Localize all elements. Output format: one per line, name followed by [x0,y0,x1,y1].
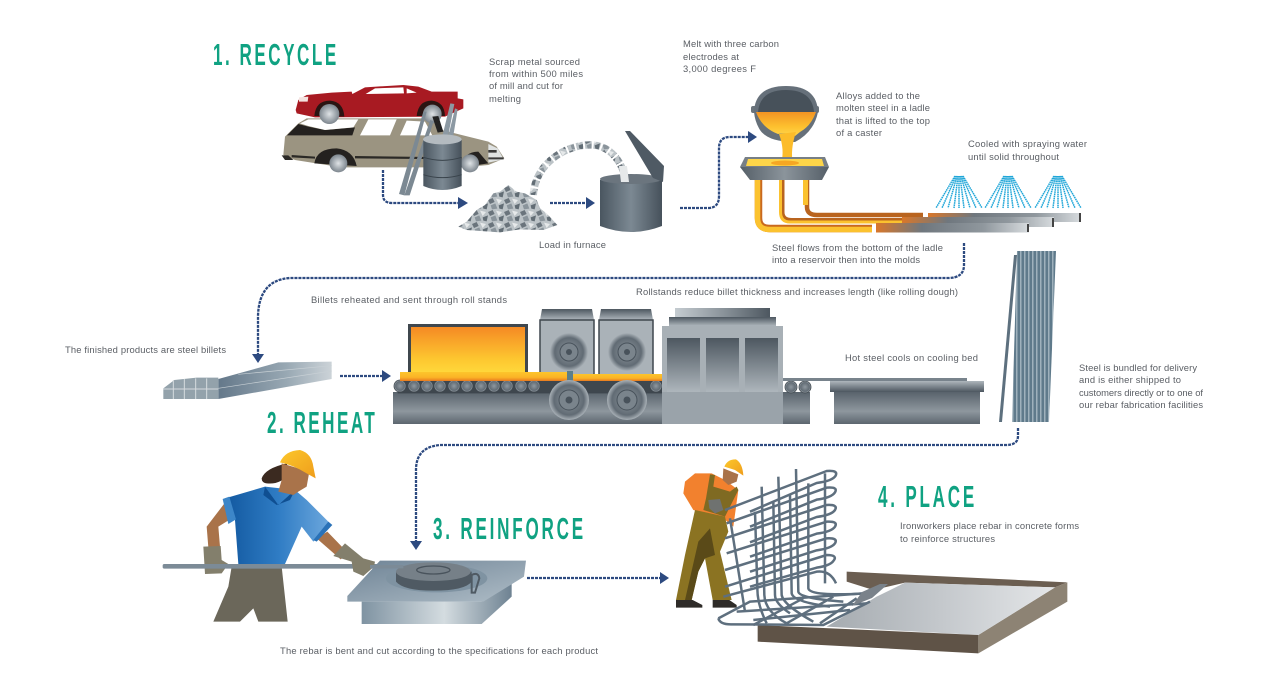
icon: scrap pile with arc [458,145,625,232]
icon: rods [399,103,458,195]
caption: bundled: Steel is bundled for delivery [1079,362,1197,373]
icon: steel billets [163,362,332,399]
icon: molds [876,213,1081,232]
rod end [370,565,403,568]
icon: roller row [394,380,663,393]
concrete over cage end [852,584,888,606]
helmet [280,450,316,478]
overalls [676,510,732,600]
panel: rolling mill [393,308,984,424]
caption: cooled: Cooled with spraying water [968,138,1087,149]
icon: cooling bed [783,378,984,424]
caption: ironworkers [900,520,1079,544]
caption: alloys [836,90,930,138]
back wall [847,572,1067,590]
caption: scrap metal: melting [489,93,521,104]
arrow: cars to scrap pile [383,170,468,209]
icon: red car [296,85,463,124]
caption: alloys: of a caster [836,127,882,138]
caption: melt: electrodes at [683,51,739,62]
face [278,463,309,495]
caption: ironworkers: to reinforce structures [900,533,995,544]
label: load in furnace: Load in furnace [539,239,606,250]
caption: bundled [1079,362,1203,410]
concrete [827,583,1055,635]
billet side [218,362,332,399]
pin [472,574,479,593]
caption: rollstands: Rollstands reduce billet thickness and increases length (like rolling dough) [636,286,958,297]
caption: steel flows: into a reservoir then into the molds [772,254,920,265]
caption: cooled: until solid throughout [968,151,1059,162]
illustration: concrete form [758,572,1067,653]
caption: cooling: Hot steel cools on cooling bed [845,352,978,363]
shirt [683,473,738,527]
caption: rebar bent: The rebar is bent and cut according to the specifications for each product [280,645,598,656]
cage hoops [723,471,836,597]
caption: melt: Melt with three carbon [683,38,779,49]
title: 2. Reheat: 2. REHEAT [267,406,375,440]
caption: bundled: our rebar fabrication facilities [1079,399,1203,410]
icon: roll stand two [599,309,653,383]
caption: alloys: Alloys added to the [836,90,920,101]
caption: scrap metal: from within 500 miles [489,68,583,79]
cage floor [718,592,877,625]
billet ends [163,378,218,399]
hair [262,463,290,484]
illustration: bending machine [347,561,526,624]
pants [213,567,288,622]
machine body [362,580,512,624]
arrow: bender to placing [527,572,669,584]
illustration: worker with rebar [163,450,399,622]
icon: pipes [758,178,923,230]
icon: stacked scrap cars and drum [282,85,504,195]
cage uprights [730,469,867,623]
icon: furnace [600,131,664,232]
icon: tundish [740,157,829,180]
overalls shadow [685,528,715,600]
shirt [225,487,332,564]
boots [676,600,737,608]
left glove [203,546,228,574]
right glove [333,543,375,576]
right wall [978,582,1067,653]
caption: alloys: molten steel in a ladle [836,102,930,113]
caption: scrap metal [489,56,583,104]
glove [708,499,723,513]
icon: drum [423,134,462,190]
arrow: bundle to bender [410,428,1018,550]
caption: alloys: that is lifted to the top [836,115,930,126]
caption: steel flows [772,242,943,265]
icon: reducing machine [662,308,810,424]
icon: exit rollers [785,381,811,393]
icon: lower rolls [549,380,647,420]
icon: rebar bundle [999,251,1056,422]
caption: scrap metal: Scrap metal sourced [489,56,580,67]
caption: scrap metal: of mill and cut for [489,80,563,91]
icon: ladle [751,86,819,164]
caption: billets: The finished products are steel billets [65,344,226,355]
caption: bundled: customers directly or to one of [1079,387,1203,398]
icon: water sprays [936,176,1081,208]
title: 3. Reinforce: 3. REINFORCE [433,512,583,546]
title: 1. Recycle: 1. RECYCLE [213,38,336,72]
helmet [724,459,743,476]
sleeve right [313,522,332,542]
icon: station wagon [282,118,504,172]
icon: mill base [393,392,663,424]
illustration: rebar cage [718,469,877,625]
face [723,468,738,485]
caption: reheated: Billets reheated and sent through roll stands [311,294,507,305]
icon: hot steel bar [400,371,662,391]
caption: ironworkers: Ironworkers place rebar in concrete forms [900,520,1079,531]
icon: roll stand one [540,309,594,383]
rebar rod [163,564,399,569]
collar [263,487,295,505]
title: 4. Place: 4. PLACE [878,480,974,514]
arrow: molds to billets [252,243,964,363]
arrow: furnace to ladle [680,131,757,208]
disc [396,562,472,591]
caption: bundled: and is either shipped to [1079,374,1181,385]
caption: melt [683,38,779,74]
arrow: pile to furnace [550,197,595,209]
slot [386,564,487,592]
bib [703,474,738,517]
top plate [347,561,526,602]
caption: cooled [968,138,1087,162]
right arm [317,532,348,559]
front wall [758,625,978,653]
arrow: billets to furnace [340,370,391,382]
caption: melt: 3,000 degrees F [683,63,756,74]
illustration: ironworker [676,459,743,608]
left arm [207,504,233,547]
sleeve [223,497,236,524]
icon: reheat furnace [408,324,528,374]
caption: steel flows: Steel flows from the bottom of the ladle [772,242,943,253]
